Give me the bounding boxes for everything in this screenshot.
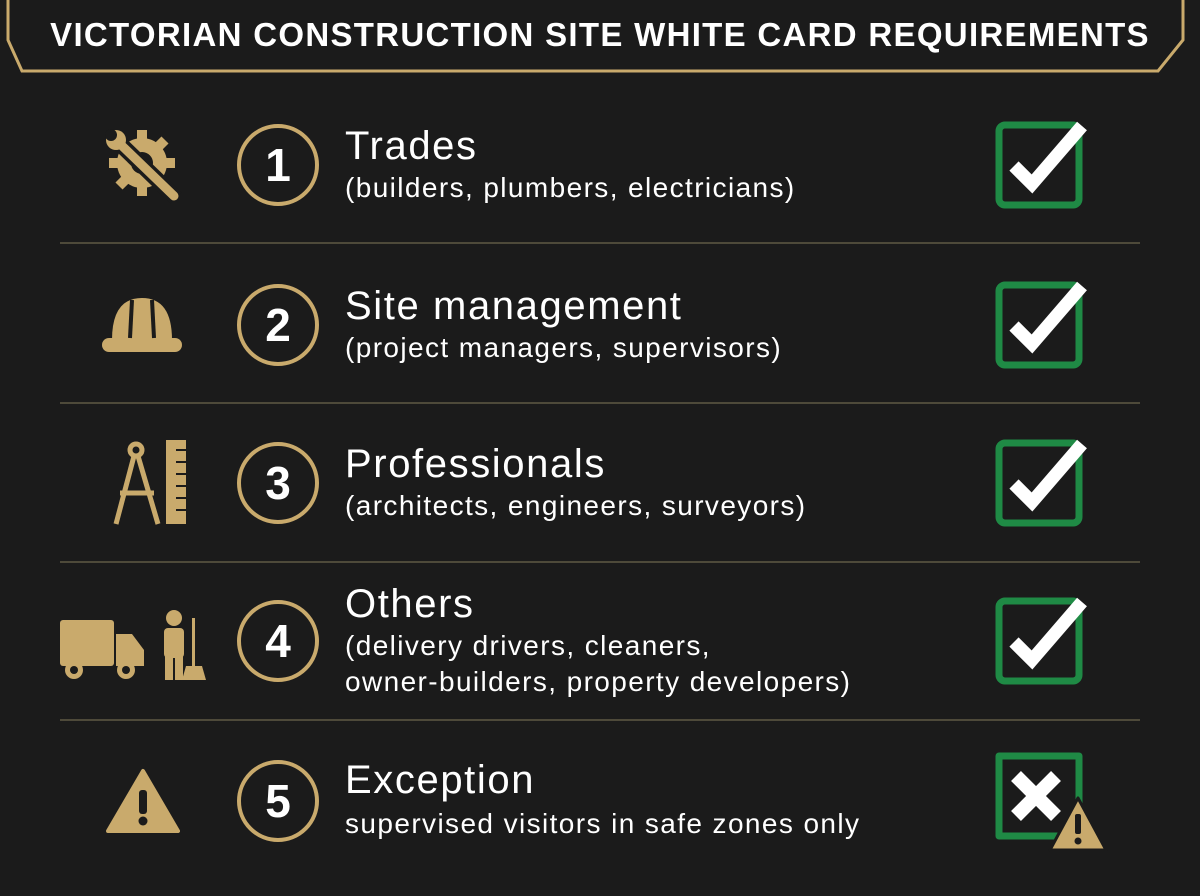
cross with warning <box>996 752 1104 848</box>
row 4: others <box>60 582 1087 697</box>
heading: Others <box>345 582 475 626</box>
check <box>996 598 1087 684</box>
check <box>996 440 1087 526</box>
row 3: professionals <box>114 440 1087 526</box>
icon: warning <box>106 768 180 833</box>
row 1: trades <box>106 122 1087 208</box>
number 5 <box>237 760 319 842</box>
check <box>996 282 1087 368</box>
row 2: site management <box>102 282 1087 368</box>
heading: Site management <box>345 284 683 328</box>
heading: Exception <box>345 758 535 802</box>
number 3: 3 <box>265 457 291 509</box>
title: VICTORIAN CONSTRUCTION SITE WHITE CARD REQUIREMENTS <box>50 16 1150 53</box>
number 5: 5 <box>265 775 291 827</box>
icon: gear and wrench <box>106 130 178 200</box>
icon: truck and cleaner <box>60 610 206 680</box>
heading: Trades: Trades <box>345 124 478 168</box>
number 2: 2 <box>265 299 291 351</box>
number 4: 4 <box>265 615 291 667</box>
number 4 <box>237 600 319 682</box>
icon: compass and ruler <box>114 440 186 525</box>
text: (architects, engineers, surveyors) <box>345 490 807 521</box>
title frame <box>6 0 1184 72</box>
text: owner-builders, property developers) <box>345 666 851 697</box>
number 1 <box>237 124 319 206</box>
icon: hard hat <box>102 298 182 352</box>
number 3 <box>237 442 319 524</box>
row 5: exception <box>106 752 1104 848</box>
text: (project managers, supervisors) <box>345 332 782 363</box>
check <box>996 122 1087 208</box>
text: supervised visitors in safe zones only <box>345 808 860 839</box>
heading: Professionals <box>345 442 606 486</box>
number 2 <box>237 284 319 366</box>
text <box>345 630 851 697</box>
text: (delivery drivers, cleaners, <box>345 630 711 661</box>
number 1: 1 <box>265 139 291 191</box>
text: (builders, plumbers, electricians) <box>345 172 796 203</box>
